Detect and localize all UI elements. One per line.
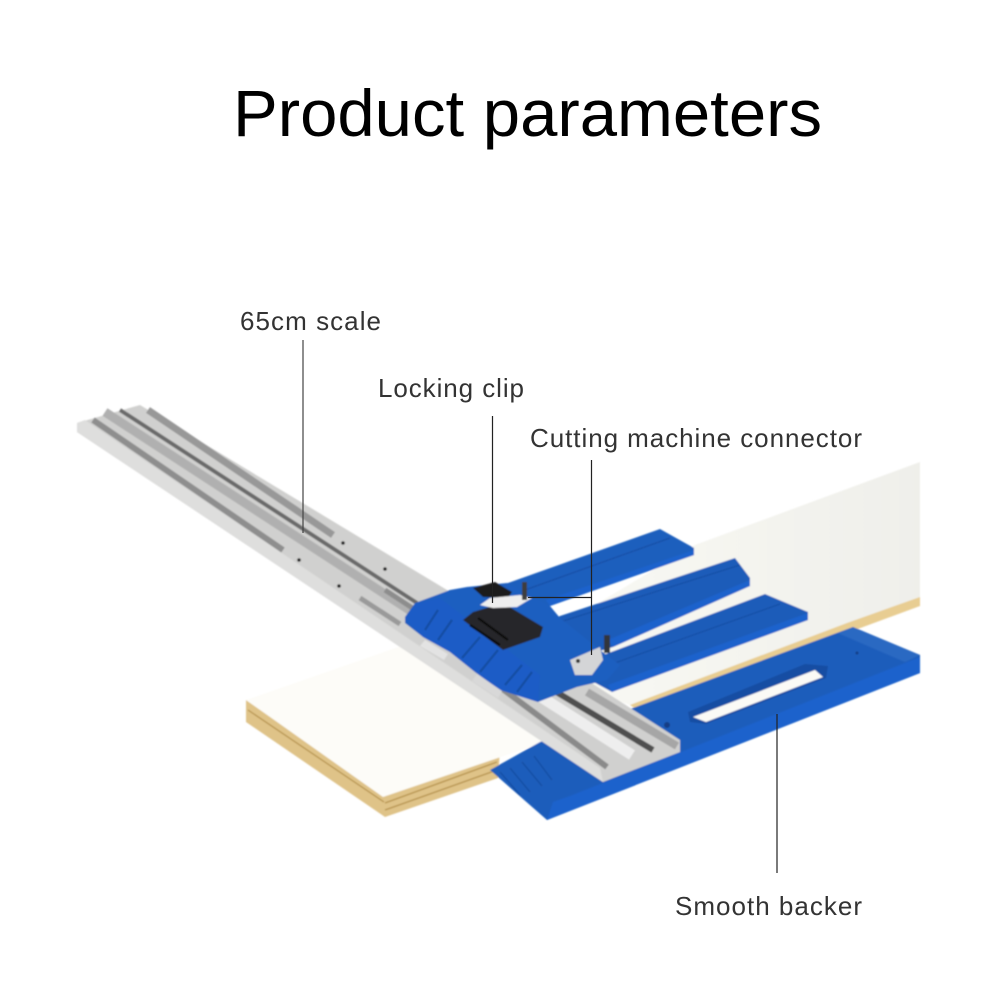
slider body bbox=[405, 583, 620, 702]
callout: cutting machine connector: Cutting machine connector bbox=[530, 423, 862, 453]
connector plates bbox=[480, 582, 610, 675]
wood board bbox=[246, 462, 920, 817]
callout: 65cm scale: 65cm scale bbox=[240, 306, 381, 336]
smooth backer plate bbox=[490, 627, 920, 820]
aluminium rail bbox=[77, 405, 680, 782]
product illustration: cutting guide on board bbox=[77, 405, 920, 820]
title: Product parameters bbox=[233, 76, 822, 150]
locking clip bbox=[463, 582, 543, 650]
callout: smooth backer: Smooth backer bbox=[675, 891, 862, 921]
callout: locking clip: Locking clip bbox=[378, 373, 524, 403]
finger plates bbox=[505, 529, 808, 692]
